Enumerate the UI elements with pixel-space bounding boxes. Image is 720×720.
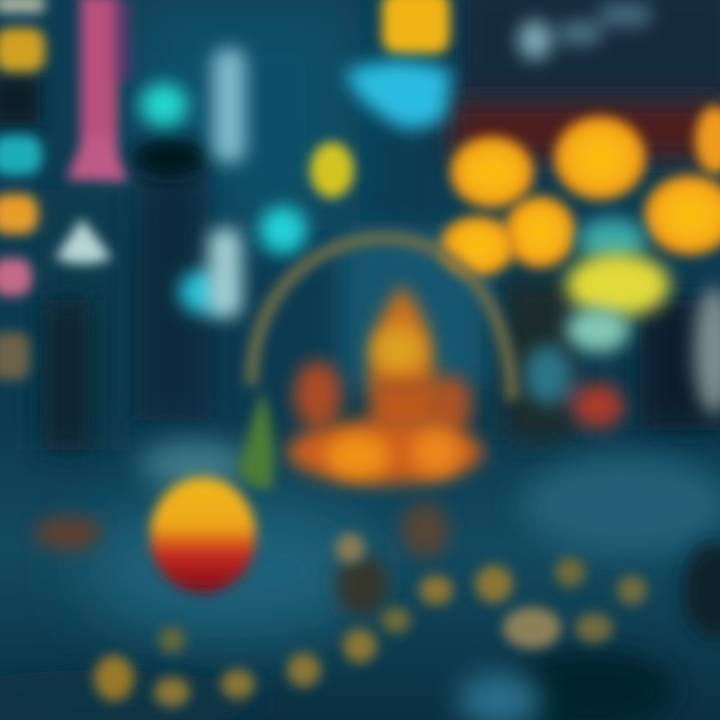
pink pillar — [66, 0, 130, 182]
distant sign text glow — [518, 4, 650, 60]
green plant — [238, 390, 274, 489]
yellow lantern small — [310, 142, 354, 198]
brown stones — [34, 502, 449, 615]
cyan glowing lights — [140, 83, 307, 314]
glowing red and yellow ball — [150, 477, 256, 593]
central orange temple — [287, 285, 483, 484]
top yellow lantern — [382, 0, 450, 54]
cyan shade — [345, 61, 452, 129]
white-blue lantern — [55, 218, 112, 264]
left edge signs — [0, 0, 45, 380]
grey arch at right edge — [694, 286, 720, 414]
orange-yellow lanterns — [440, 106, 720, 276]
circular arch — [252, 238, 512, 400]
yellow and aqua lantern — [566, 218, 670, 352]
golden pebbles — [94, 533, 647, 707]
small teal and red objects — [524, 345, 624, 428]
pale vertical light bars — [208, 48, 246, 318]
